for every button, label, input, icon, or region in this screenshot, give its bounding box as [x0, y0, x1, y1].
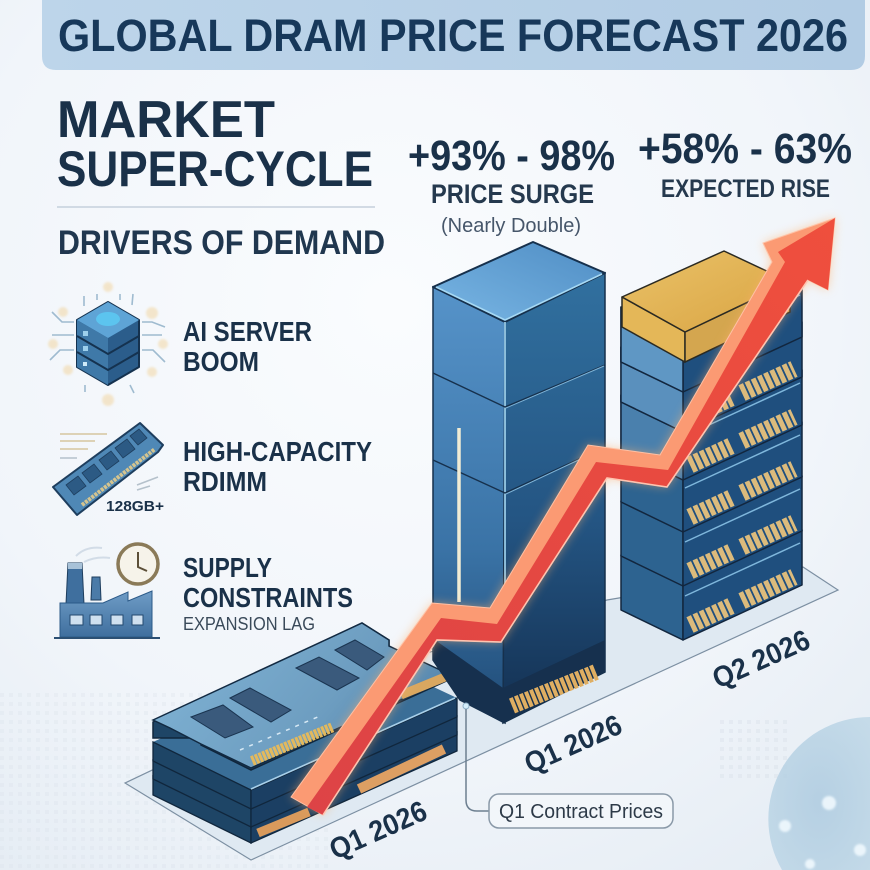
heading: market super-cycle: SUPER-CYCLE: [57, 141, 373, 197]
callout: Q1 contract prices: Q1 Contract Prices: [499, 801, 663, 823]
bar: Q1 2026 flat memory stack: [153, 623, 457, 843]
text: AI server boom: AI SERVER: [183, 316, 312, 347]
heading: drivers of demand: DRIVERS OF DEMAND: [58, 224, 385, 262]
axis label: Q2 2026: Q2 2026: [708, 624, 815, 695]
axis label: first Q1 2026: Q1 2026: [325, 795, 432, 866]
block base with gold contacts: [433, 640, 605, 723]
label: 128GB+: 128GB+: [106, 498, 164, 515]
title banner: [42, 0, 865, 70]
heading: market super-cycle: [57, 91, 373, 197]
chart platform: [125, 567, 838, 860]
icon: RDIMM module: [53, 423, 164, 515]
sub-label: expansion lag: EXPANSION LAG: [183, 614, 315, 634]
text: supply constraints: [183, 552, 353, 634]
icon: factory and clock: [54, 544, 160, 638]
text: supply constraints: SUPPLY: [183, 552, 272, 583]
trend arrow: [291, 218, 835, 815]
gold cap block: [622, 251, 790, 362]
bar: Q1 2026 tall block: [433, 242, 605, 723]
light reflection: [457, 428, 461, 602]
stat: Q1 price surge: +93% - 98%: [408, 132, 615, 180]
heading: market super-cycle: MARKET: [57, 91, 275, 149]
text: high-capacity RDIMM: RDIMM: [183, 466, 267, 497]
callout: Q1 contract prices: [463, 703, 673, 828]
stat: Q1 price surge: [408, 132, 615, 237]
stat: Q2 expected rise: [638, 125, 852, 203]
text: AI server boom: [183, 316, 312, 377]
stat label: expected rise: EXPECTED RISE: [661, 175, 830, 203]
text: supply constraints: CONSTRAINTS: [183, 582, 353, 613]
stat note: nearly double: (Nearly Double): [441, 215, 581, 237]
text: high-capacity RDIMM: HIGH-CAPACITY: [183, 436, 372, 467]
text: high-capacity RDIMM: [183, 436, 372, 497]
stat: Q2 expected rise: +58% - 63%: [638, 125, 852, 173]
stat label: price surge: PRICE SURGE: [431, 179, 594, 209]
top circuit board: [153, 623, 453, 770]
text: AI server boom: BOOM: [183, 346, 259, 377]
icon: AI server: [48, 282, 168, 406]
decorative sphere: [768, 717, 870, 870]
axis label: second Q1 2026: Q1 2026: [520, 709, 627, 780]
bar: Q2 2026 stacked modules: [621, 251, 802, 640]
